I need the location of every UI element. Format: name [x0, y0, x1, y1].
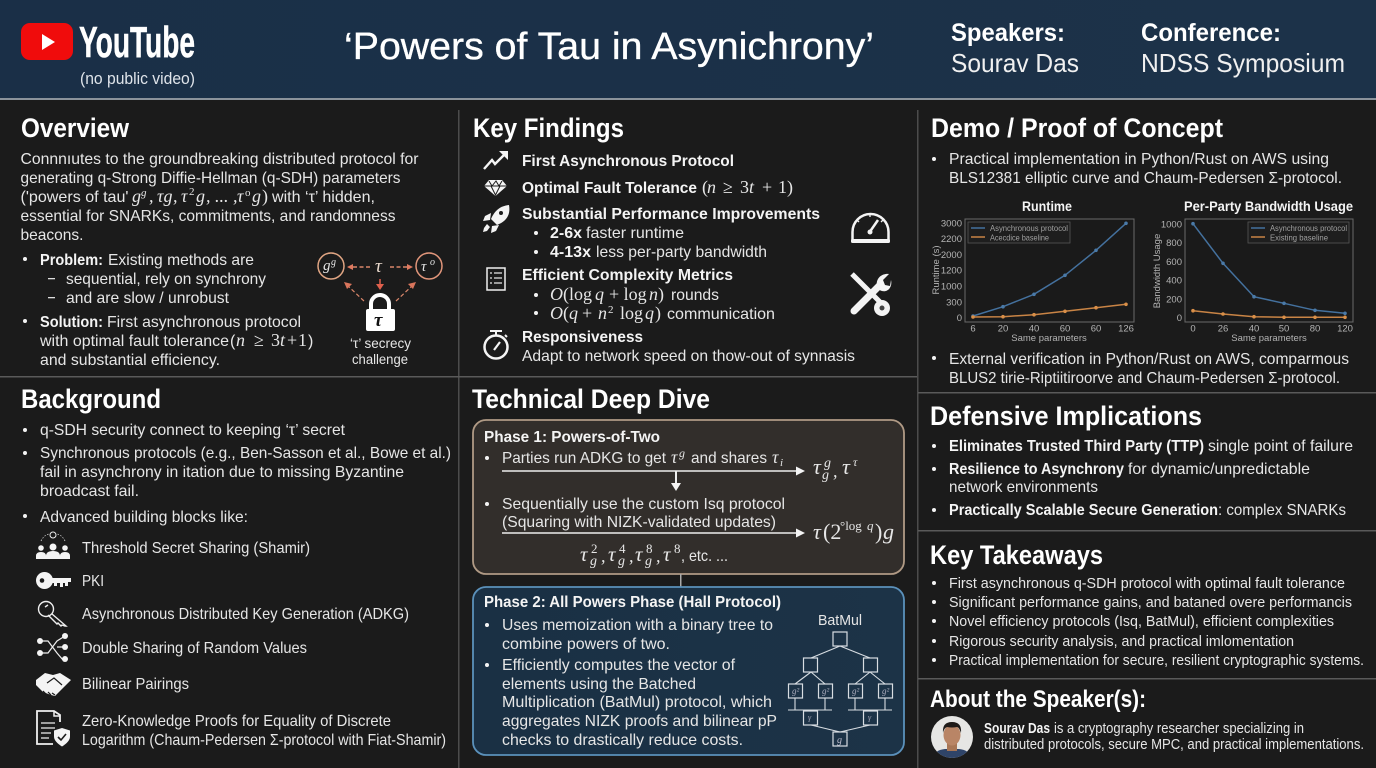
panel: phase 1 — [473, 420, 904, 574]
problem bullet: Existing methods are — [108, 252, 254, 269]
chart: runtime: 126 — [1118, 324, 1134, 334]
implications list: single point of failure — [1208, 438, 1353, 455]
external verification note: External verification in Python/Rust on AWS, comparmous — [949, 351, 1349, 368]
chart: per-party bandwidth usage: 26 — [1218, 324, 1228, 334]
diagram: tau secrecy challenge: ‘τ’ secrecy — [350, 336, 411, 351]
chart: per-party bandwidth usage: 800 — [1166, 238, 1182, 249]
arrow: to tau power — [502, 528, 805, 538]
icon: double sharing graph — [37, 633, 68, 662]
video note: (no public video) — [80, 69, 195, 88]
powers list: τ — [635, 542, 644, 566]
finding: optimal fault tolerance — [522, 177, 793, 198]
output: tau g: g — [824, 456, 831, 471]
diagram: BatMul tree: g² — [822, 686, 830, 696]
finding: optimal fault tolerance: + — [762, 177, 772, 197]
finding: complexity metrics: q — [595, 284, 604, 304]
item: ADKG: Asynchronous Distributed Key Generation (ADKG) — [82, 606, 409, 623]
finding: optimal fault tolerance: ( — [702, 177, 708, 198]
chart: per-party bandwidth usage: Same parameters — [1231, 333, 1307, 344]
background bullets: Synchronous protocols (e.g., Ben-Sasson et al., Bowe et al.) — [40, 445, 451, 462]
panel: key findings — [473, 113, 891, 365]
overview intro text: Connnıutes to the groundbreaking distributed protocol for — [20, 151, 419, 168]
item: PKI: PKI — [82, 573, 104, 590]
finding: complexity metrics: Efficient Complexity Metrics — [522, 267, 733, 284]
overview intro text: g — [132, 186, 141, 206]
item: bilinear pairings: Bilinear Pairings — [82, 676, 189, 693]
solution bullet — [23, 314, 313, 369]
step: parties run ADKG: and shares — [691, 450, 767, 467]
chart: runtime: Asynchronous protocol — [990, 223, 1068, 233]
overview intro text: , — [173, 186, 178, 206]
solution bullet: Solution: — [40, 314, 103, 331]
step: sequential isq protocol — [485, 496, 785, 531]
background bullets: Advanced building blocks like: — [40, 509, 248, 526]
diagram: tau secrecy challenge: o — [430, 257, 435, 268]
output: tau power — [813, 518, 894, 544]
solution bullet: ) — [308, 333, 313, 350]
solution bullet: + — [287, 330, 297, 350]
chart: per-party bandwidth usage: Bandwidth Usage — [1152, 234, 1163, 308]
implications list: : complex SNARKs — [1218, 502, 1346, 519]
solution bullet: n — [236, 330, 245, 350]
finding: optimal fault tolerance: 1 — [778, 177, 787, 197]
finding: responsiveness: Adapt to network speed on thow-out of synnasis — [522, 348, 855, 365]
solution bullet: 1 — [298, 330, 307, 350]
chart: per-party bandwidth usage — [1152, 199, 1353, 344]
powers list: g — [618, 554, 625, 569]
diagram: BatMul tree — [788, 612, 892, 746]
phase 2 text: Efficiently computes the vector of — [502, 657, 736, 674]
chart: per-party bandwidth usage: 0 — [1177, 313, 1182, 324]
overview intro text: g — [196, 186, 205, 206]
solution bullet: 3 — [271, 330, 280, 350]
finding: complexity metrics — [522, 267, 775, 324]
chart: runtime: 2000 — [941, 250, 962, 261]
implications list — [932, 438, 1353, 519]
finding: performance improvements: Substantial Performance Improvements — [522, 206, 820, 223]
finding: complexity metrics: ) — [655, 303, 661, 324]
overview intro text: o — [245, 187, 251, 199]
overview intro text: τ — [181, 186, 188, 206]
powers list: 2 — [591, 541, 598, 556]
finding: complexity metrics: + — [582, 303, 592, 323]
solution bullet: with optimal fault tolerance — [39, 333, 229, 350]
diagram: tau secrecy challenge: challenge — [352, 352, 408, 367]
problem bullet: Problem: — [40, 252, 103, 269]
chart: per-party bandwidth usage: Existing baseline — [1270, 232, 1328, 242]
finding: performance improvements: 2-6x — [550, 225, 582, 242]
speaker bio: is a cryptography researcher specializing in — [1054, 721, 1304, 737]
background bullets: broadcast fail. — [40, 483, 139, 500]
external verification note: BLUS2 tirie-Riptiitiroorve and Chaum-Pedersen Σ-protocol. — [949, 370, 1340, 387]
finding: complexity metrics: n — [649, 284, 658, 304]
finding: complexity metrics: ( — [563, 303, 569, 324]
panel: background — [21, 384, 451, 749]
overview intro text: essential for SNARKs, commitments, and randomness — [20, 208, 396, 225]
icon: YouTube logo: YouTube — [79, 18, 195, 67]
output: tau power: q — [867, 518, 874, 533]
step: parties run ADKG — [485, 446, 783, 469]
item: zero-knowledge proofs — [82, 713, 446, 749]
heading: demo: Demo / Proof of Concept — [931, 113, 1223, 143]
icon: threshold sharing — [36, 532, 70, 559]
step: sequential isq protocol: Sequentially use the custom Isq protocol — [502, 496, 785, 513]
powers list: , etc. ... — [681, 548, 728, 565]
powers list: 8 — [646, 541, 652, 556]
title: ‘Powers of Tau in Asynichrony’ — [344, 26, 874, 68]
speakers: Speakers: — [951, 19, 1065, 47]
takeaways list: Novel efficiency protocols (Isq, BatMul), efficient complexities — [949, 613, 1334, 630]
chart: per-party bandwidth usage: 40 — [1249, 324, 1259, 334]
icon: tools — [852, 274, 891, 316]
solution bullet: First asynchronous protocol — [107, 314, 301, 331]
speaker bio: Sourav Das — [984, 721, 1050, 737]
chart: runtime: Runtime (s) — [931, 245, 942, 295]
finding: complexity metrics: + log — [609, 284, 647, 304]
overview intro text: , ... , — [206, 186, 238, 206]
chart: runtime: 6 — [970, 324, 976, 334]
panel: phase 2 — [473, 587, 904, 755]
panel: demo / proof of concept — [931, 113, 1353, 387]
finding: responsiveness: Responsiveness — [522, 329, 643, 346]
phase 2 text: checks to drastically reduce costs. — [502, 732, 743, 749]
panel: technical deep dive — [472, 384, 904, 755]
finding: optimal fault tolerance: Optimal Fault Tolerance — [522, 180, 697, 197]
icon: YouTube logo — [21, 18, 195, 67]
heading: about the speakers: About the Speaker(s): — [930, 686, 1146, 713]
output: tau power: (2 — [823, 519, 841, 544]
finding: complexity metrics: 2 — [608, 304, 614, 316]
diagram: BatMul tree: g² — [882, 686, 890, 696]
finding: complexity metrics: n — [598, 303, 607, 323]
chart: per-party bandwidth usage: 0 — [1190, 324, 1196, 334]
step: parties run ADKG: Parties run ADKG to get — [502, 450, 667, 467]
diagram: BatMul tree: g — [837, 735, 842, 746]
output: tau power: g — [883, 519, 894, 544]
heading: key findings: Key Findings — [473, 113, 624, 143]
solution bullet: and substantial efficiency. — [40, 352, 220, 369]
overview intro text: generating q-Strong Diffie-Hellman (q-SDH) parameters — [20, 170, 400, 187]
finding: first asynchronous protocol: First Asynchronous Protocol — [522, 153, 734, 170]
overview intro text: ('powers of tau' — [20, 189, 128, 206]
item: threshold secret sharing: Threshold Secret Sharing (Shamir) — [82, 540, 310, 557]
step: parties run ADKG: g — [679, 446, 685, 460]
output: tau power: ) — [875, 519, 882, 544]
solution bullet: t — [280, 330, 286, 350]
output: tau power: τ — [813, 519, 822, 544]
icon: document with shield — [37, 711, 70, 746]
powers list: τ — [608, 542, 617, 566]
diagram: tau secrecy challenge: g — [331, 257, 336, 268]
chart: runtime — [931, 199, 1134, 344]
chart: runtime: 60 — [1091, 324, 1101, 334]
diagram: tau secrecy challenge — [318, 253, 442, 367]
heading: overview: Overview — [21, 113, 130, 143]
output: tau g: , — [833, 461, 838, 481]
phase 2 text — [485, 617, 777, 749]
icon: outlined key — [38, 602, 66, 626]
powers list: , — [629, 546, 634, 566]
chart: runtime: 1200 — [941, 266, 962, 276]
diagram: BatMul tree: BatMul — [818, 612, 862, 629]
diagram: tau secrecy challenge: τ — [375, 256, 383, 277]
background bullets — [23, 422, 451, 526]
diagram: tau secrecy challenge: τ — [421, 259, 427, 275]
powers list: τ — [580, 542, 589, 566]
demo description — [932, 151, 1342, 187]
chart: runtime: 300 — [946, 298, 962, 308]
chart: per-party bandwidth usage: 50 — [1279, 324, 1289, 334]
heading: background: Background — [21, 384, 161, 414]
icon: checklist — [487, 268, 505, 290]
panel: key takeaways — [930, 540, 1364, 669]
chart: runtime: 0 — [957, 313, 962, 324]
output: tau power: °log — [840, 518, 862, 533]
demo description: BLS12381 elliptic curve and Chaum-Pedersen Σ-protocol. — [949, 170, 1342, 187]
icon: key — [36, 572, 71, 589]
overview intro text: ) — [262, 186, 268, 207]
diagram: BatMul tree: γ — [808, 713, 812, 722]
finding: complexity metrics: q — [645, 303, 654, 323]
finding: complexity metrics: (log — [563, 284, 592, 305]
powers list — [580, 541, 728, 569]
chart: per-party bandwidth usage: 120 — [1337, 324, 1353, 334]
overview intro text: 2 — [189, 186, 194, 198]
background bullets: q-SDH security connect to keeping ‘τ’ secret — [40, 422, 346, 439]
chart: per-party bandwidth usage: Asynchronous protocol — [1270, 223, 1347, 233]
demo description: Practical implementation in Python/Rust on AWS using — [949, 151, 1329, 168]
diagram: BatMul tree: g² — [792, 686, 800, 696]
finding: responsiveness — [522, 329, 855, 365]
speakers: Sourav Das — [951, 48, 1079, 78]
powers list: g — [645, 554, 652, 569]
chart: per-party bandwidth usage: Per-Party Bandwidth Usage — [1184, 199, 1353, 214]
speaker bio — [984, 721, 1364, 753]
powers list: 4 — [619, 541, 626, 556]
phase 2 text: elements using the Batched — [502, 676, 696, 693]
chart: per-party bandwidth usage: 1000 — [1161, 220, 1182, 230]
chart: runtime: Acecdice baseline — [990, 232, 1049, 242]
diagram: BatMul tree: g² — [852, 686, 860, 696]
overview intro text: g — [141, 187, 147, 199]
chart: per-party bandwidth usage: 400 — [1166, 276, 1182, 286]
output: tau g: τ — [853, 455, 858, 469]
icon: handshake — [36, 673, 71, 696]
icon: speedometer — [851, 214, 890, 243]
portrait: Sourav Das — [931, 716, 973, 760]
item: zero-knowledge proofs: Logarithm (Chaum-Pedersen Σ-protocol with Fiat-Shamir) — [82, 732, 446, 749]
step: parties run ADKG: τ — [671, 447, 678, 467]
takeaways list: Rigorous security analysis, and practical imlomentation — [949, 633, 1294, 650]
takeaways list — [932, 575, 1364, 669]
overview intro text: τ — [237, 186, 244, 206]
finding: optimal fault tolerance: 3 — [740, 177, 749, 197]
implications list: for dynamic/unpredictable — [1128, 461, 1310, 478]
finding: performance improvements: 4-13x — [550, 244, 591, 261]
powers list: 8 — [674, 541, 680, 556]
finding: complexity metrics: log — [620, 303, 643, 323]
panel: about the speakers — [930, 686, 1364, 760]
conference — [1141, 19, 1345, 78]
finding: optimal fault tolerance: ) — [787, 177, 793, 198]
solution bullet: ≥ — [254, 330, 264, 350]
phase 2 heading: Phase 2: All Powers Phase (Hall Protocol) — [484, 594, 781, 611]
output: tau g — [813, 454, 858, 483]
problem bullet: and are slow / unrobust — [66, 290, 230, 307]
overview intro text: with ‘τ’ hidden, — [271, 189, 375, 206]
diagram: tau secrecy challenge: τ — [374, 310, 383, 331]
diagram: BatMul tree: γ — [868, 713, 872, 722]
implications list: Eliminates Trusted Third Party (TTP) — [949, 438, 1204, 455]
powers list: , — [601, 546, 606, 566]
powers list: τ — [663, 542, 672, 566]
phase 2 text: combine powers of two. — [502, 636, 670, 653]
panel: defensive implications — [930, 401, 1353, 519]
finding: performance improvements: less per-party bandwidth — [596, 244, 767, 261]
chart: runtime: 40 — [1029, 324, 1039, 334]
chart: runtime: 2200 — [941, 234, 962, 245]
step: parties run ADKG: i — [780, 457, 783, 469]
chart: per-party bandwidth usage: 80 — [1310, 324, 1320, 334]
item: zero-knowledge proofs: Zero-Knowledge Proofs for Equality of Discrete — [82, 713, 391, 730]
chart: per-party bandwidth usage: 600 — [1166, 257, 1182, 268]
phase 2 text: Uses memoization with a binary tree to — [502, 617, 773, 634]
implications list: Resilience to Asynchrony — [949, 461, 1124, 478]
arrow: down — [671, 471, 681, 491]
arrow: to tau g — [502, 466, 805, 476]
header band — [0, 0, 1376, 100]
implications list: Practically Scalable Secure Generation — [949, 502, 1218, 519]
finding: performance improvements: faster runtime — [586, 225, 684, 242]
speakers — [951, 19, 1079, 78]
external verification note — [932, 351, 1349, 387]
chart: runtime: 3000 — [941, 218, 962, 230]
diagram: tau secrecy challenge: g — [323, 258, 331, 274]
finding: complexity metrics: ) — [658, 284, 664, 305]
item: double sharing: Double Sharing of Random Values — [82, 640, 307, 657]
implications list: network environments — [949, 479, 1098, 496]
finding: optimal fault tolerance: n — [707, 177, 716, 197]
phase 2 text: aggregates NIZK proofs and bilinear pP — [502, 713, 777, 730]
heading: key takeaways: Key Takeaways — [930, 540, 1103, 570]
step: sequential isq protocol: (Squaring with NIZK-validated updates) — [502, 514, 776, 531]
finding: complexity metrics: rounds — [671, 287, 719, 304]
finding: performance improvements — [522, 206, 820, 261]
output: tau g: τ — [813, 454, 822, 479]
problem bullet — [23, 252, 266, 307]
icon: trending arrow — [484, 151, 508, 169]
finding: complexity metrics: communication — [667, 306, 775, 323]
conference: Conference: — [1141, 19, 1281, 47]
overview intro text: g — [252, 186, 261, 206]
takeaways list: Significant performance gains, and bataned overe performancis — [949, 594, 1352, 611]
finding: complexity metrics: O — [550, 284, 563, 304]
overview intro text: , — [149, 186, 154, 206]
chart: per-party bandwidth usage: 200 — [1166, 294, 1182, 306]
conference: NDSS Symposium — [1141, 48, 1345, 78]
heading: defensive implications: Defensive Implications — [930, 401, 1202, 431]
phase 2 text: Multiplication (BatMul) protocol, which — [502, 694, 772, 711]
overview intro text: τg — [157, 186, 172, 206]
icon: diamond — [484, 180, 507, 196]
takeaways list: First asynchronous q-SDH protocol with optimal fault tolerance — [949, 575, 1345, 592]
phase 1 heading: Phase 1: Powers-of-Two — [484, 429, 660, 446]
heading: technical deep dive: Technical Deep Dive — [472, 384, 710, 414]
powers list: , — [656, 546, 660, 566]
chart: runtime: 20 — [998, 324, 1008, 334]
finding: complexity metrics: O — [550, 303, 563, 323]
finding: optimal fault tolerance: t — [749, 177, 755, 197]
finding: complexity metrics: q — [569, 303, 578, 323]
output: tau g: τ — [842, 454, 851, 479]
icon: rocket — [483, 205, 509, 233]
output: tau g: g — [822, 468, 829, 483]
overview intro text — [20, 151, 419, 244]
chart: runtime: Same parameters — [1011, 333, 1087, 344]
chart: runtime: 60 — [1060, 324, 1070, 334]
solution bullet: ( — [230, 333, 236, 350]
icon: stopwatch — [484, 331, 508, 358]
powers list: g — [590, 554, 597, 569]
step: parties run ADKG: τ — [772, 447, 779, 467]
chart: runtime: Runtime — [1022, 199, 1072, 214]
panel: overview — [20, 113, 442, 369]
overview intro text: beacons. — [20, 227, 84, 244]
problem bullet: sequential, rely on synchrony — [66, 271, 266, 288]
background bullets: fail in asynchrony in itation due to missing Byzantine — [40, 464, 404, 481]
finding: optimal fault tolerance: ≥ — [723, 177, 733, 197]
chart: runtime: 1000 — [941, 282, 962, 292]
